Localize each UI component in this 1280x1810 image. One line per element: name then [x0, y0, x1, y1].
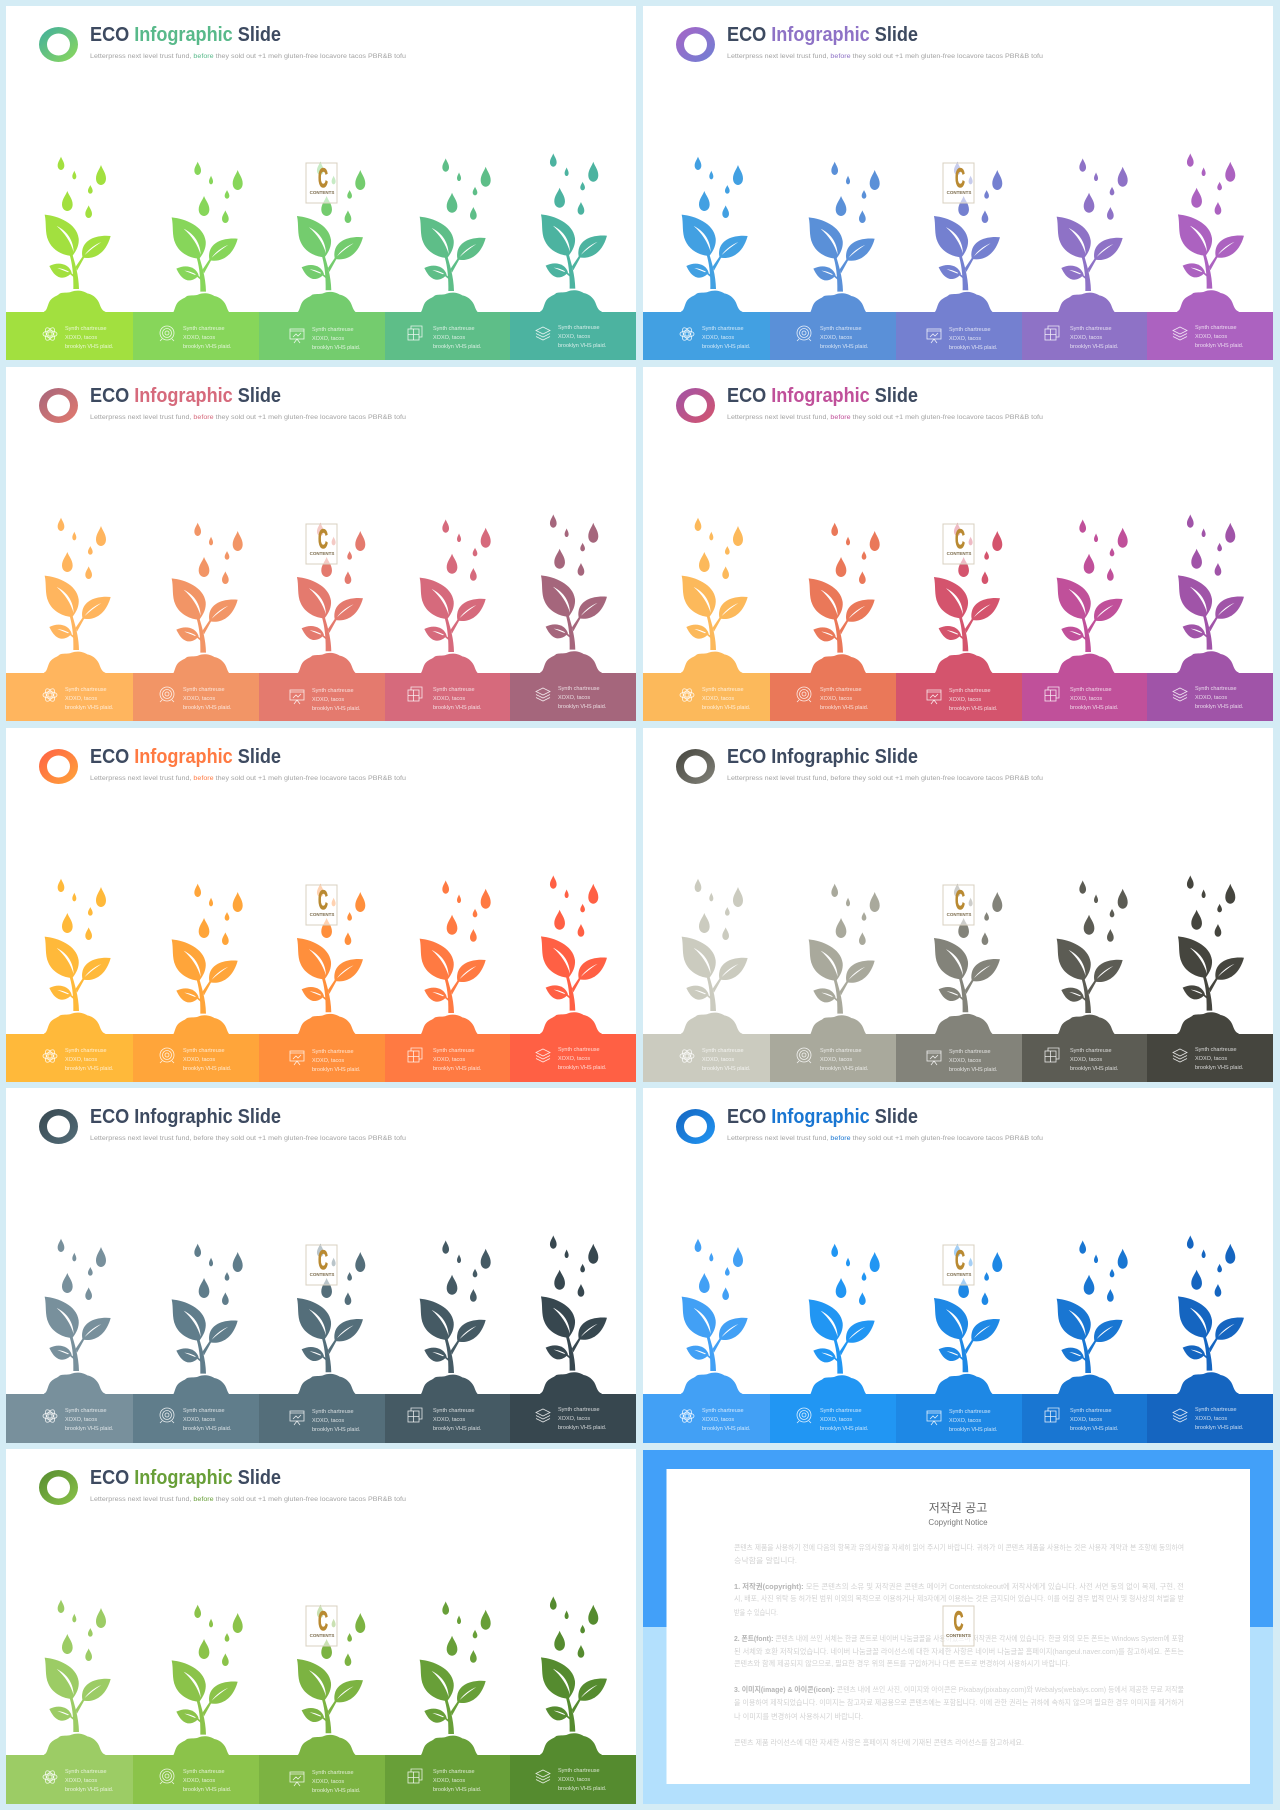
column 2: Synth chartreuse [820, 687, 862, 693]
column 1: Synth chartreuse [702, 1048, 744, 1054]
column 3: XOXO, tacos [949, 697, 981, 703]
column 1 [6, 1239, 133, 1443]
notice section 1: 1. 저작권(copyright): 모든 콘텐츠의 소유 및 저작권은 콘텐츠 메이커 Contentstokeout에 저작사에게 있습니다. 사전 서면 동의 없이 복제, 구현, 전 [734, 1582, 1184, 1591]
logo ring [676, 388, 715, 423]
column 2 [770, 1244, 896, 1443]
notice section 2: 콘텐츠와 함께 제공되지 않으므로, 필요한 경우 위의 폰트를 구입하거나 다른 폰트로 변경하여 사용하시기 바랍니다. [734, 1659, 1070, 1668]
column 1: XOXO, tacos [702, 335, 734, 341]
column 2 [770, 162, 896, 360]
notice section 2: 2. 폰트(font): 콘텐츠 내에 쓰인 서체는 한글 폰트로 네이버 나눔글꼴을 사용하였으며 저작권은 각사에 있습니다. 한글 외의 모든 폰트는 Windows System에 포함 [734, 1634, 1184, 1643]
notice section 1: 받을 수 있습니다. [734, 1608, 778, 1617]
panel: slide 3 coral [6, 367, 636, 721]
column 2: XOXO, tacos [183, 1778, 215, 1784]
column 3: XOXO, tacos [312, 1058, 344, 1064]
column 5 [510, 514, 636, 721]
column 1: brooklyn VHS plaid. [702, 344, 751, 350]
column 4: brooklyn VHS plaid. [1070, 344, 1119, 350]
column 4: brooklyn VHS plaid. [1070, 705, 1119, 711]
column 3: brooklyn VHS plaid. [312, 1427, 361, 1433]
column 4: brooklyn VHS plaid. [433, 1787, 482, 1793]
column 2: brooklyn VHS plaid. [183, 705, 232, 711]
column 1 [643, 879, 770, 1082]
column 2: brooklyn VHS plaid. [183, 1787, 232, 1793]
column 2 [133, 1605, 259, 1804]
watermark: CONTENTS [947, 912, 971, 917]
column 4: XOXO, tacos [433, 1417, 465, 1423]
column 2: XOXO, tacos [183, 696, 215, 702]
watermark: CONTENTS [947, 551, 971, 556]
column 3 [896, 523, 1022, 721]
notice intro [734, 1543, 1184, 1565]
watermark [306, 1606, 337, 1646]
column 4: XOXO, tacos [433, 1057, 465, 1063]
column 5 [1147, 1235, 1273, 1443]
column 3 [896, 1244, 1022, 1443]
column 2: XOXO, tacos [183, 335, 215, 341]
column 1: XOXO, tacos [65, 1778, 97, 1784]
column 3: XOXO, tacos [312, 1418, 344, 1424]
column 4: XOXO, tacos [1070, 696, 1102, 702]
column 3: XOXO, tacos [949, 1058, 981, 1064]
watermark: C [318, 524, 328, 554]
column 1: Synth chartreuse [65, 1048, 107, 1054]
watermark: C [955, 524, 965, 554]
column 4 [1022, 158, 1147, 360]
column 4 [385, 158, 510, 360]
watermark: CONTENTS [310, 912, 334, 917]
notice section 3: 을 이용하여 제작되었습니다. 이미지는 참고자료 제공용으로 콘텐츠에는 포함됩니다. 이에 관한 권리는 귀하에 속하지 않으며 필요한 경우 이미지를 제거하거 [734, 1698, 1184, 1707]
column 1: Synth chartreuse [702, 1408, 744, 1414]
column 2: XOXO, tacos [820, 1057, 852, 1063]
subtitle: Letterpress next level trust fund, before they sold out +1 meh gluten-free locavore tacos PBR&B tofu [90, 53, 406, 60]
column 5: Synth chartreuse [558, 1768, 600, 1774]
column 1: Synth chartreuse [65, 687, 107, 693]
notice intro: 승낙함을 알립니다. [734, 1556, 797, 1565]
title: ECO Infographic Slide [90, 1467, 281, 1489]
column 2: Synth chartreuse [183, 1408, 225, 1414]
column 2 [133, 884, 259, 1082]
column 3: Synth chartreuse [312, 327, 354, 333]
column 5: Synth chartreuse [1195, 1047, 1237, 1053]
watermark: C [955, 1245, 965, 1275]
column 4 [1022, 880, 1147, 1082]
column 2: Synth chartreuse [183, 326, 225, 332]
column 5: brooklyn VHS plaid. [558, 1786, 607, 1792]
column 3: brooklyn VHS plaid. [949, 1427, 998, 1433]
column 4: Synth chartreuse [433, 687, 475, 693]
column 4 [1022, 519, 1147, 721]
column 2: brooklyn VHS plaid. [820, 1426, 869, 1432]
column 4 [385, 880, 510, 1082]
column 1 [643, 157, 770, 360]
column 2: Synth chartreuse [183, 687, 225, 693]
column 5: XOXO, tacos [558, 695, 590, 701]
column 5 [1147, 153, 1273, 360]
column 4: brooklyn VHS plaid. [433, 705, 482, 711]
column 2: brooklyn VHS plaid. [820, 705, 869, 711]
watermark [943, 524, 974, 564]
column 3: brooklyn VHS plaid. [312, 1788, 361, 1794]
column 3: brooklyn VHS plaid. [949, 706, 998, 712]
column 1: XOXO, tacos [65, 1057, 97, 1063]
column 4: brooklyn VHS plaid. [433, 1066, 482, 1072]
column 4 [385, 1601, 510, 1804]
column 1: Synth chartreuse [65, 1769, 107, 1775]
column 5 [510, 1235, 636, 1443]
column 4: XOXO, tacos [1070, 335, 1102, 341]
column 2: brooklyn VHS plaid. [183, 1066, 232, 1072]
column 3: XOXO, tacos [949, 1418, 981, 1424]
logo ring [676, 749, 715, 784]
column 1 [6, 157, 133, 360]
column 5: XOXO, tacos [1195, 1416, 1227, 1422]
logo ring [676, 27, 715, 62]
panel: copyright notice [643, 1450, 1273, 1804]
column 4: Synth chartreuse [433, 326, 475, 332]
watermark: CONTENTS [310, 551, 334, 556]
column 3: Synth chartreuse [312, 1409, 354, 1415]
column 4 [385, 1240, 510, 1443]
column 4: XOXO, tacos [1070, 1057, 1102, 1063]
panel: slide 5 orange [6, 728, 636, 1082]
panel: slide 7 slate [6, 1088, 636, 1443]
logo ring [676, 1109, 715, 1144]
column 2 [133, 523, 259, 721]
column 2: brooklyn VHS plaid. [820, 344, 869, 350]
watermark: C [955, 163, 965, 193]
notice section 3 [734, 1685, 1184, 1721]
watermark: CONTENTS [310, 1633, 334, 1638]
title: ECO Infographic Slide [90, 385, 281, 407]
column 2: XOXO, tacos [820, 1417, 852, 1423]
watermark: C [318, 885, 328, 915]
logo ring [39, 749, 78, 784]
column 4 [1022, 1240, 1147, 1443]
column 1 [643, 1239, 770, 1443]
notice section 1: 시, 배포, 사진 위탁 등 허가된 범위 이외의 목적으로 이용하거나 제3자에게 이용하는 것은 금지되어 있습니다. 이를 어길 경우 법적 민사 및 형사상의 처벌을 받 [734, 1594, 1184, 1603]
column 1: brooklyn VHS plaid. [65, 1066, 114, 1072]
subtitle: Letterpress next level trust fund, before they sold out +1 meh gluten-free locavore tacos PBR&B tofu [727, 414, 1043, 421]
column 3: XOXO, tacos [312, 336, 344, 342]
column 5: brooklyn VHS plaid. [558, 1425, 607, 1431]
column 4: Synth chartreuse [433, 1769, 475, 1775]
panel: slide 8 blue [643, 1088, 1273, 1443]
logo ring [39, 27, 78, 62]
watermark [306, 885, 337, 925]
column 3: Synth chartreuse [949, 1049, 991, 1055]
column 2: brooklyn VHS plaid. [183, 1426, 232, 1432]
column 1: brooklyn VHS plaid. [65, 1787, 114, 1793]
watermark: CONTENTS [310, 190, 334, 195]
column 1: brooklyn VHS plaid. [65, 1426, 114, 1432]
watermark: C [954, 1606, 963, 1636]
subtitle: Letterpress next level trust fund, before they sold out +1 meh gluten-free locavore tacos PBR&B tofu [727, 1135, 1043, 1142]
watermark: C [955, 885, 965, 915]
notice footer: 콘텐츠 제품 라이선스에 대한 자세한 사항은 홈페이지 하단에 기재된 콘텐츠 라이선스를 참고하세요. [734, 1738, 1024, 1747]
title: ECO Infographic Slide [90, 746, 281, 768]
column 3: Synth chartreuse [949, 327, 991, 333]
column 4: XOXO, tacos [433, 335, 465, 341]
column 1 [6, 1600, 133, 1804]
column 2: Synth chartreuse [820, 1408, 862, 1414]
column 5: brooklyn VHS plaid. [1195, 1065, 1244, 1071]
column 3 [896, 162, 1022, 360]
column 5: XOXO, tacos [1195, 334, 1227, 340]
column 1: XOXO, tacos [702, 1417, 734, 1423]
column 5: Synth chartreuse [1195, 1407, 1237, 1413]
column 3: brooklyn VHS plaid. [312, 345, 361, 351]
column 4: Synth chartreuse [1070, 326, 1112, 332]
column 2 [770, 523, 896, 721]
column 4: Synth chartreuse [1070, 1048, 1112, 1054]
column 3: Synth chartreuse [949, 688, 991, 694]
column 1 [6, 879, 133, 1082]
column 5: brooklyn VHS plaid. [1195, 1425, 1244, 1431]
column 1: XOXO, tacos [65, 1417, 97, 1423]
column 1: Synth chartreuse [702, 326, 744, 332]
watermark: C [318, 163, 328, 193]
column 3: XOXO, tacos [949, 336, 981, 342]
column 1: Synth chartreuse [65, 326, 107, 332]
column 4: brooklyn VHS plaid. [1070, 1066, 1119, 1072]
watermark [306, 1245, 337, 1285]
column 5: brooklyn VHS plaid. [558, 704, 607, 710]
column 3 [259, 523, 385, 721]
column 1 [6, 518, 133, 721]
column 3: brooklyn VHS plaid. [312, 1067, 361, 1073]
column 5: XOXO, tacos [558, 1056, 590, 1062]
watermark [306, 163, 337, 203]
column 4: brooklyn VHS plaid. [433, 1426, 482, 1432]
column 4: XOXO, tacos [1070, 1417, 1102, 1423]
subtitle: Letterpress next level trust fund, before they sold out +1 meh gluten-free locavore tacos PBR&B tofu [90, 775, 406, 782]
column 3: Synth chartreuse [312, 1770, 354, 1776]
column 3 [896, 884, 1022, 1082]
column 1: brooklyn VHS plaid. [65, 705, 114, 711]
column 5: XOXO, tacos [1195, 1056, 1227, 1062]
panel: slide 9 green [6, 1449, 636, 1804]
notice section 2 [734, 1634, 1184, 1668]
watermark [306, 524, 337, 564]
column 2 [133, 162, 259, 360]
watermark [943, 1245, 974, 1285]
column 2 [770, 884, 896, 1082]
column 4: XOXO, tacos [433, 696, 465, 702]
column 1: XOXO, tacos [65, 335, 97, 341]
column 5: Synth chartreuse [558, 1407, 600, 1413]
notice intro: 콘텐츠 제품을 사용하기 전에 다음의 항목과 유의사항을 자세히 읽어 주시기 바랍니다. 귀하가 이 콘텐츠 제품을 사용하는 것은 사용자 계약과 본 조항에 동의하여 [734, 1543, 1184, 1552]
column 5 [510, 1596, 636, 1804]
column 4: Synth chartreuse [1070, 687, 1112, 693]
column 1: XOXO, tacos [702, 696, 734, 702]
column 4 [385, 519, 510, 721]
column 5: Synth chartreuse [558, 1047, 600, 1053]
column 1: brooklyn VHS plaid. [702, 1066, 751, 1072]
title: ECO Infographic Slide [727, 385, 918, 407]
column 4: brooklyn VHS plaid. [433, 344, 482, 350]
column 3: Synth chartreuse [949, 1409, 991, 1415]
column 5: Synth chartreuse [1195, 686, 1237, 692]
column 3: XOXO, tacos [312, 697, 344, 703]
title: ECO Infographic Slide [727, 24, 918, 46]
column 4: Synth chartreuse [433, 1048, 475, 1054]
subtitle: Letterpress next level trust fund, before they sold out +1 meh gluten-free locavore tacos PBR&B tofu [727, 53, 1043, 60]
title: ECO Infographic Slide [90, 24, 281, 46]
column 1: XOXO, tacos [65, 696, 97, 702]
subtitle: Letterpress next level trust fund, before they sold out +1 meh gluten-free locavore tacos PBR&B tofu [90, 1135, 406, 1142]
column 5 [1147, 875, 1273, 1082]
column 2: Synth chartreuse [183, 1769, 225, 1775]
watermark: CONTENTS [310, 1272, 334, 1277]
column 5 [510, 153, 636, 360]
column 3 [259, 1605, 385, 1804]
notice subheading: Copyright Notice [928, 1518, 988, 1527]
column 3 [259, 884, 385, 1082]
column 2: XOXO, tacos [820, 335, 852, 341]
logo ring [39, 1109, 78, 1144]
column 1: brooklyn VHS plaid. [702, 1426, 751, 1432]
column 2: Synth chartreuse [820, 326, 862, 332]
panel: slide 4 magenta [643, 367, 1273, 721]
column 3 [259, 1244, 385, 1443]
panel: slide 2 blue purple [643, 6, 1273, 360]
panel: slide 1 green [6, 6, 636, 360]
column 2: brooklyn VHS plaid. [183, 344, 232, 350]
column 5: XOXO, tacos [558, 334, 590, 340]
column 3: brooklyn VHS plaid. [312, 706, 361, 712]
notice section 3: 3. 이미지(image) & 아이콘(icon): 콘텐츠 내에 쓰인 사진, 이미지와 아이콘은 Pixabay(pixabay.com)와 Webalys(webalys.com) 등에서 제공한 무료 저작물 [734, 1685, 1184, 1694]
column 3: XOXO, tacos [312, 1779, 344, 1785]
column 3 [259, 162, 385, 360]
watermark: CONTENTS [946, 1633, 971, 1638]
column 5: brooklyn VHS plaid. [558, 1065, 607, 1071]
column 1: brooklyn VHS plaid. [702, 705, 751, 711]
watermark: C [318, 1245, 328, 1275]
notice section 1 [734, 1582, 1184, 1617]
subtitle: Letterpress next level trust fund, before they sold out +1 meh gluten-free locavore tacos PBR&B tofu [727, 775, 1043, 782]
notice section 2: 된 서체와 호환 저작되었습니다. 네이버 나눔글꼴 라이선스에 대한 자세한 사항은 네이버 나눔글꼴 홈페이지(hangeul.naver.com)를 참고하세요. 폰트는 [734, 1647, 1184, 1656]
watermark: C [318, 1606, 328, 1636]
title: ECO Infographic Slide [727, 746, 918, 768]
column 5: XOXO, tacos [558, 1416, 590, 1422]
column 2: Synth chartreuse [820, 1048, 862, 1054]
column 2 [133, 1244, 259, 1443]
column 2: XOXO, tacos [183, 1417, 215, 1423]
column 5: XOXO, tacos [1195, 695, 1227, 701]
column 1: Synth chartreuse [65, 1408, 107, 1414]
column 1: Synth chartreuse [702, 687, 744, 693]
watermark [943, 885, 974, 925]
notice section 3: 나 이미지를 변경하여 사용하시기 바랍니다. [734, 1712, 863, 1721]
column 4: XOXO, tacos [433, 1778, 465, 1784]
column 2: XOXO, tacos [820, 696, 852, 702]
column 5: Synth chartreuse [558, 325, 600, 331]
column 1 [643, 518, 770, 721]
watermark [943, 1606, 974, 1646]
column 3: brooklyn VHS plaid. [949, 1067, 998, 1073]
column 5 [1147, 514, 1273, 721]
column 4: Synth chartreuse [1070, 1408, 1112, 1414]
watermark: CONTENTS [947, 1272, 971, 1277]
logo ring [39, 388, 78, 423]
subtitle: Letterpress next level trust fund, before they sold out +1 meh gluten-free locavore tacos PBR&B tofu [90, 1496, 406, 1503]
subtitle: Letterpress next level trust fund, before they sold out +1 meh gluten-free locavore tacos PBR&B tofu [90, 414, 406, 421]
column 3: Synth chartreuse [312, 688, 354, 694]
column 1: brooklyn VHS plaid. [65, 344, 114, 350]
column 4: brooklyn VHS plaid. [1070, 1426, 1119, 1432]
column 2: Synth chartreuse [183, 1048, 225, 1054]
column 5: brooklyn VHS plaid. [558, 343, 607, 349]
column 5: brooklyn VHS plaid. [1195, 343, 1244, 349]
logo ring [39, 1470, 78, 1505]
column 5: XOXO, tacos [558, 1777, 590, 1783]
column 2: XOXO, tacos [183, 1057, 215, 1063]
column 5 [510, 875, 636, 1082]
column 5: brooklyn VHS plaid. [1195, 704, 1244, 710]
notice heading: 저작권 공고 [929, 1501, 987, 1515]
column 4: Synth chartreuse [433, 1408, 475, 1414]
column 2: brooklyn VHS plaid. [820, 1066, 869, 1072]
column 3: brooklyn VHS plaid. [949, 345, 998, 351]
title: ECO Infographic Slide [727, 1106, 918, 1128]
column 1: XOXO, tacos [702, 1057, 734, 1063]
watermark: CONTENTS [947, 190, 971, 195]
column 3: Synth chartreuse [312, 1049, 354, 1055]
title: ECO Infographic Slide [90, 1106, 281, 1128]
panel: slide 6 gray [643, 728, 1273, 1082]
watermark [943, 163, 974, 203]
column 5: Synth chartreuse [558, 686, 600, 692]
column 5: Synth chartreuse [1195, 325, 1237, 331]
